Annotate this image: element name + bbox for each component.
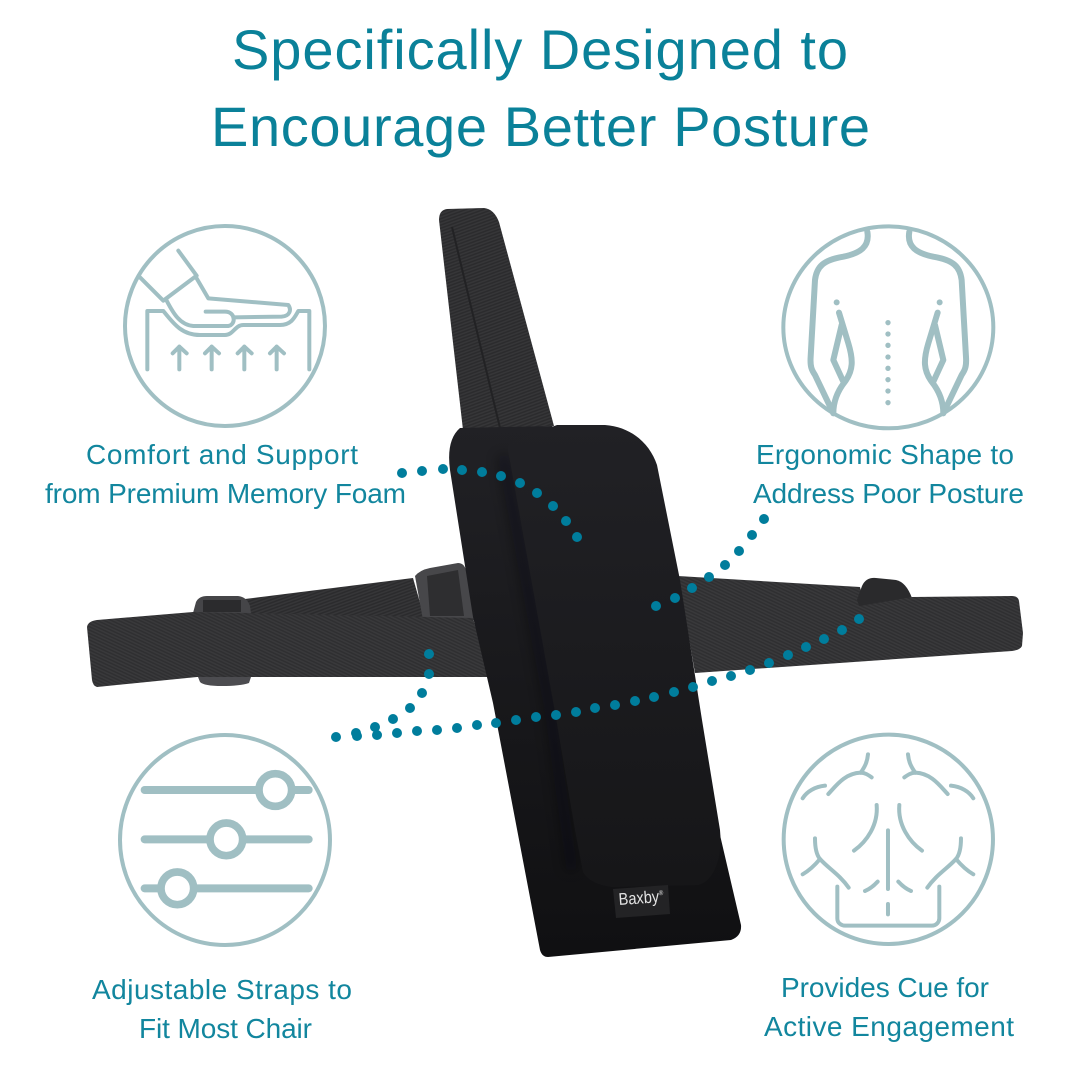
label: adjustable straps: Adjustable Straps to xyxy=(92,974,352,1005)
label: active engagement: Provides Cue for xyxy=(781,972,989,1003)
dotted line: comfort and support xyxy=(397,464,582,542)
left front strap xyxy=(87,612,490,687)
title: Encourage Better Posture xyxy=(211,95,870,158)
pad shadow beside foam roll xyxy=(503,455,572,870)
label: comfort and support: from Premium Memory Foam xyxy=(45,478,406,509)
icon: back muscles xyxy=(784,735,993,944)
label: adjustable straps: Fit Most Chair xyxy=(139,1013,312,1044)
label: comfort and support: Comfort and Support xyxy=(86,439,358,470)
brand label xyxy=(613,885,670,918)
label: active engagement xyxy=(764,972,1014,1042)
brand label: ® xyxy=(659,889,664,897)
left back strap xyxy=(245,578,425,620)
large buckle xyxy=(415,563,480,620)
backing pad xyxy=(449,426,741,957)
right buckle xyxy=(857,578,912,608)
left small buckle xyxy=(193,596,251,686)
label: comfort and support xyxy=(45,439,406,509)
label: adjustable straps xyxy=(92,974,352,1044)
label: ergonomic shape: Address Poor Posture xyxy=(753,478,1024,509)
icon: back with shoulder blades xyxy=(783,226,993,428)
product: posture support with straps xyxy=(87,208,1023,957)
foam roll xyxy=(508,425,720,887)
vertical top strap xyxy=(439,208,554,430)
label: active engagement: Active Engagement xyxy=(764,1011,1014,1042)
title: Specifically Designed to xyxy=(232,18,848,81)
dotted line: active engagement xyxy=(352,614,864,741)
right back strap xyxy=(678,576,866,622)
right front strap xyxy=(685,596,1023,673)
dotted line: adjustable straps xyxy=(331,649,434,742)
label: ergonomic shape xyxy=(753,439,1024,509)
title xyxy=(211,18,870,158)
dotted line: ergonomic shape xyxy=(651,514,769,611)
icon: memory foam with arm xyxy=(125,226,325,426)
label: ergonomic shape: Ergonomic Shape to xyxy=(756,439,1014,470)
brand label: Baxby xyxy=(618,887,666,909)
icon: adjustable sliders xyxy=(120,735,330,945)
